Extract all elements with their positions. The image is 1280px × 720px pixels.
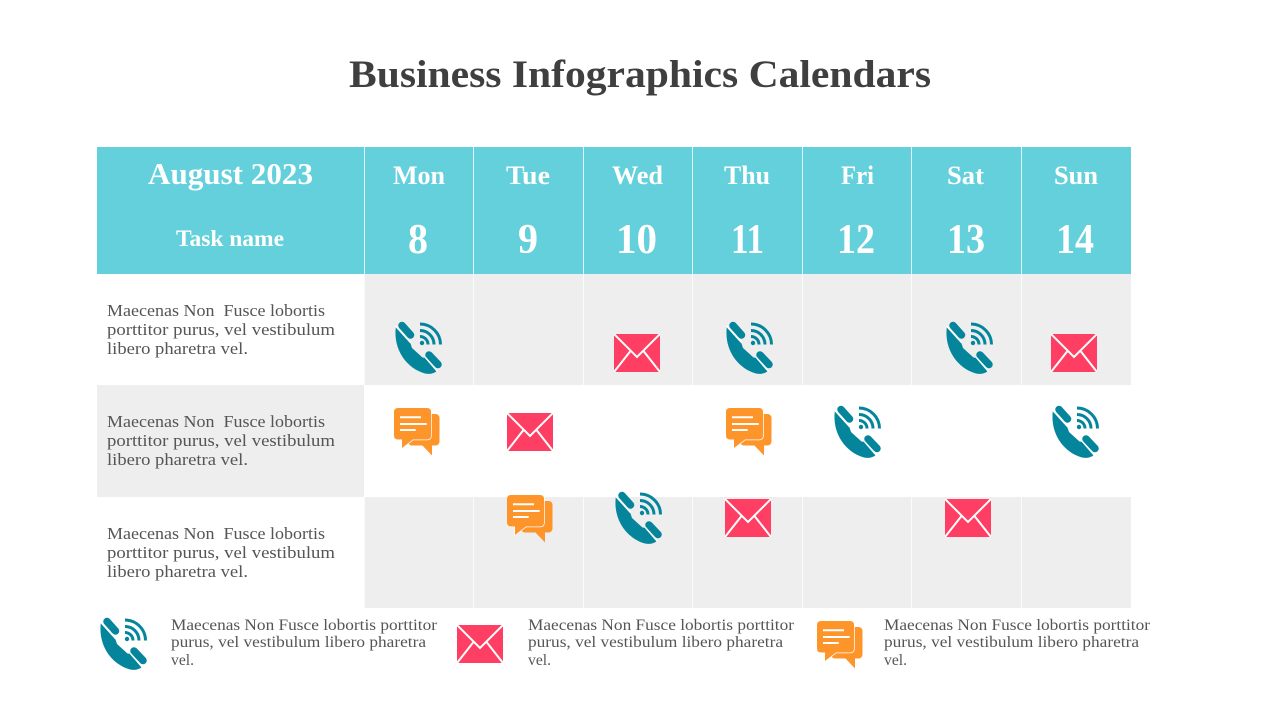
weekdays: Fri bbox=[841, 161, 874, 190]
task text 1: Maecenas Non Fusce lobortis bbox=[107, 301, 325, 320]
legend: mail: Maecenas Non Fusce lobortis porttitor bbox=[528, 617, 795, 634]
task text 3 bbox=[107, 524, 335, 581]
weekdays: Wed bbox=[612, 161, 664, 190]
weekdays: Tue bbox=[506, 161, 550, 190]
weekdays: Sun bbox=[1054, 161, 1099, 190]
month heading: August 2023 bbox=[148, 156, 313, 191]
legend: chat: Maecenas Non Fusce lobortis porttitor bbox=[884, 617, 1151, 634]
task text 2: libero pharetra vel. bbox=[107, 450, 248, 469]
table header band bbox=[97, 147, 1131, 274]
legend: phone: vel. bbox=[171, 652, 194, 669]
legend: phone bbox=[100, 617, 438, 670]
legend: chat: purus, vel vestibulum libero pharetra bbox=[884, 634, 1139, 651]
task text 1 bbox=[107, 301, 335, 358]
task text 2: porttitor purus, vel vestibulum bbox=[107, 431, 335, 450]
legend: chat bbox=[817, 617, 1151, 669]
weekdays bbox=[393, 161, 1099, 190]
task text 3: libero pharetra vel. bbox=[107, 562, 248, 581]
task text 1: porttitor purus, vel vestibulum bbox=[107, 320, 335, 339]
dates: 10 bbox=[616, 217, 657, 263]
dates: 9 bbox=[518, 217, 538, 263]
legend: phone: purus, vel vestibulum libero pharetra bbox=[171, 634, 426, 651]
task text 1: libero pharetra vel. bbox=[107, 339, 248, 358]
panel: calendar table bbox=[97, 147, 1131, 608]
weekdays: Sat bbox=[947, 161, 984, 190]
dates: 8 bbox=[408, 217, 428, 263]
dates bbox=[408, 217, 1094, 263]
legend: mail: vel. bbox=[528, 652, 551, 669]
row shading bbox=[97, 274, 1131, 608]
legend: mail: purus, vel vestibulum libero pharetra bbox=[528, 634, 783, 651]
task name heading: Task name bbox=[176, 226, 284, 251]
task text 3: porttitor purus, vel vestibulum bbox=[107, 543, 335, 562]
icons: row 3 bbox=[507, 494, 991, 544]
dates: 11 bbox=[731, 217, 764, 263]
legend: mail bbox=[457, 617, 795, 669]
dates: 12 bbox=[837, 217, 875, 263]
weekdays: Thu bbox=[724, 161, 770, 190]
task text 2: Maecenas Non Fusce lobortis bbox=[107, 412, 325, 431]
icons: row 1 bbox=[395, 324, 1097, 374]
legend: chat: vel. bbox=[884, 652, 907, 669]
task text 3: Maecenas Non Fusce lobortis bbox=[107, 524, 325, 543]
task text 2 bbox=[107, 412, 335, 469]
dates: 13 bbox=[947, 217, 985, 263]
icons: row 2 bbox=[394, 408, 1098, 458]
title: Business Infographics Calendars bbox=[349, 53, 931, 96]
legend: phone: Maecenas Non Fusce lobortis porttitor bbox=[171, 617, 438, 634]
dates: 14 bbox=[1056, 217, 1094, 263]
weekdays: Mon bbox=[393, 161, 446, 190]
